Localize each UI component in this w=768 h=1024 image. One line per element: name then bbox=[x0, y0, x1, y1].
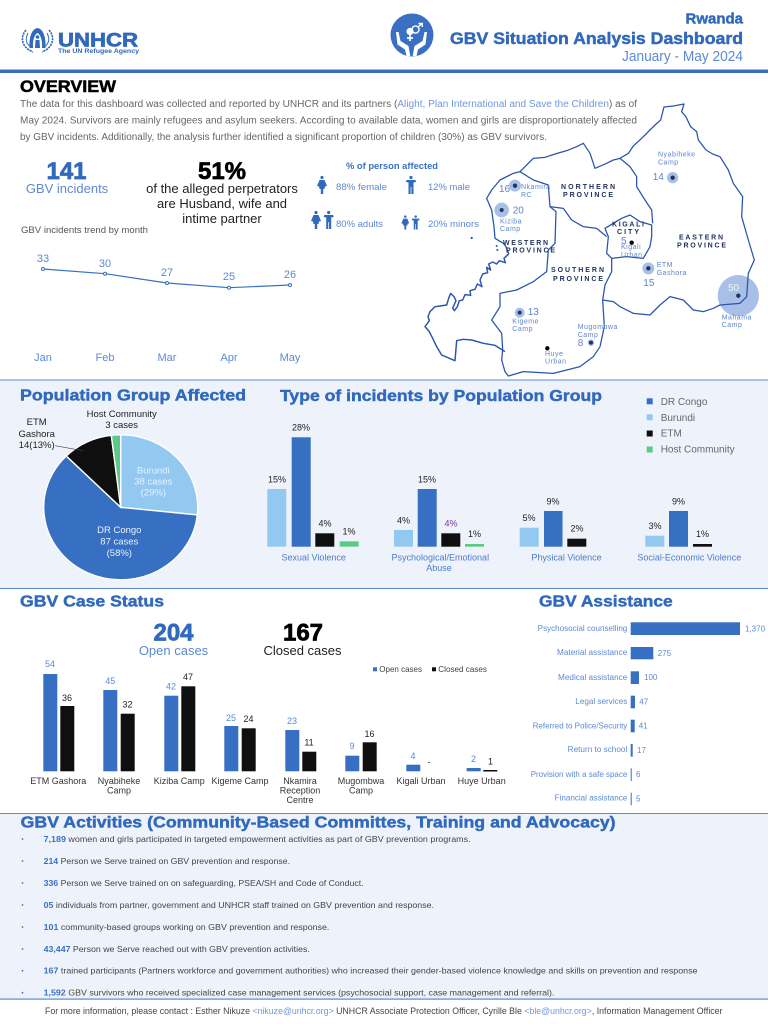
bar chart: incidents: 2% bbox=[570, 524, 584, 534]
icon: minors bbox=[401, 215, 420, 230]
bar chart: case status: 25 bbox=[226, 713, 236, 723]
icon: female bbox=[317, 176, 327, 194]
bar chart: incidents: 9% bbox=[546, 496, 560, 506]
bar chart: assistance: 1,370 bbox=[745, 624, 766, 634]
icon: adults bbox=[311, 211, 334, 229]
bar chart: case status: Kigeme Camp bbox=[211, 776, 269, 786]
bar chart: assistance: 275 bbox=[658, 649, 672, 658]
bar chart: incidents: 9% bbox=[672, 496, 685, 506]
panel: GBV assistance bbox=[531, 594, 766, 805]
map values: 8 bbox=[578, 338, 584, 349]
line chart: GBV incidents trend by month: 25 bbox=[223, 271, 235, 283]
bar chart: case status: Centre bbox=[286, 795, 314, 805]
map labels: provinces: SOUTHERN bbox=[551, 267, 604, 274]
legend: ETM bbox=[661, 428, 682, 440]
overview text bbox=[20, 99, 637, 143]
bar chart: case status: 45 bbox=[105, 676, 115, 686]
bar chart: case status: 4 bbox=[410, 751, 416, 761]
map values: 15 bbox=[643, 278, 655, 289]
bar chart: case status: Huye Urban bbox=[458, 776, 506, 786]
stat: closed cases: 167 bbox=[283, 620, 323, 647]
map labels: camps: Kigali bbox=[621, 244, 641, 251]
panel: GBV case status bbox=[20, 594, 506, 805]
bullet list: 101 community-based groups working on GBV prevention and response. bbox=[44, 922, 329, 932]
footer contact: For more information, please contact : Esther Nikuze <nikuze@unhcr.org> UNHCR Associate Protection Officer, Cyrille Ble <ble@unhcr.org>, Information Management Officer bbox=[45, 1006, 722, 1016]
bar chart: incidents: Physical Violence bbox=[531, 552, 602, 562]
overview text: May 2024. Survivors are mainly refugees and asylum seekers. According to available data, women and girls are disproportionately affected bbox=[20, 116, 637, 126]
icon: male bbox=[406, 176, 416, 194]
map labels: camps bbox=[500, 152, 752, 366]
bar chart: case status: Mugombwa bbox=[338, 776, 384, 786]
bar chart: incidents bbox=[267, 422, 741, 573]
bar chart: case status: 1 bbox=[488, 756, 493, 766]
map labels: camps: Huye bbox=[545, 351, 563, 358]
bar chart: case status: 24 bbox=[243, 714, 254, 724]
line chart: GBV incidents trend by month: 27 bbox=[161, 267, 173, 279]
map labels: provinces: PROVINCE bbox=[553, 276, 603, 283]
pie labels: 14(13%) bbox=[19, 440, 55, 451]
pie labels: 38 cases bbox=[134, 476, 173, 488]
pie labels: DR Congo bbox=[97, 525, 141, 536]
panel: population group affected bbox=[18, 388, 246, 580]
bar chart: case status: ETM Gashora bbox=[30, 776, 86, 786]
pie chart bbox=[44, 435, 198, 580]
bar chart: incidents: Sexual Violence bbox=[282, 552, 346, 562]
stat: perpetrators: of the alleged perpetrators bbox=[146, 181, 298, 196]
stat: GBV incidents: GBV incidents bbox=[26, 181, 109, 196]
bar chart: case status: Camp bbox=[107, 786, 131, 796]
map labels: camps: RC bbox=[521, 192, 532, 199]
bar chart: assistance: Medical assistance bbox=[558, 673, 628, 682]
line chart: GBV incidents trend by month: Jan bbox=[34, 352, 52, 364]
stat: GBV incidents: 141 bbox=[46, 158, 87, 185]
bar chart: case status: 2 bbox=[471, 754, 476, 764]
pie labels: ETM bbox=[27, 417, 47, 428]
bar chart: case status: Kigali Urban bbox=[396, 776, 446, 786]
bar chart: incidents: 5% bbox=[522, 513, 536, 523]
bar chart: case status: Nyabiheke bbox=[98, 776, 140, 786]
line chart: GBV incidents trend by month: GBV incidents trend by month bbox=[21, 225, 148, 236]
map values bbox=[499, 172, 740, 349]
panel: GBV activities: GBV Activities (Community-Based Committes, Training and Advocacy) bbox=[21, 814, 616, 831]
bar chart: assistance: Return to school bbox=[568, 745, 628, 754]
bar chart: incidents: 15% bbox=[418, 474, 436, 484]
bullet list: 167 trained participants (Partners workforce and government authorities) who increased their gender-based violence knowledge and skills on prevention and response bbox=[44, 966, 698, 976]
bar chart: case status: 36 bbox=[62, 693, 72, 703]
UNHCR logo: UNHCR bbox=[58, 30, 138, 52]
map labels: camps: Camp bbox=[500, 226, 521, 233]
bar chart: assistance: 100 bbox=[644, 673, 658, 682]
stat: open cases: 204 bbox=[153, 620, 194, 647]
pie labels: (58%) bbox=[107, 548, 132, 559]
bar chart: incidents: 4% bbox=[318, 518, 332, 528]
bar chart: incidents: Social-Economic Violence bbox=[637, 552, 741, 562]
stat: perpetrators bbox=[146, 158, 298, 226]
panel: GBV assistance: GBV Assistance bbox=[539, 594, 673, 611]
overview heading: OVERVIEW bbox=[20, 78, 116, 96]
map labels: camps: Nkamira bbox=[521, 184, 551, 191]
panel: % of person affected bbox=[311, 161, 479, 230]
stat: open cases bbox=[139, 620, 209, 658]
legend: Host Community bbox=[661, 444, 735, 456]
bar chart: assistance: 5 bbox=[636, 794, 641, 804]
legend: Open cases bbox=[379, 665, 422, 674]
map labels: provinces: EASTERN bbox=[679, 234, 723, 242]
bar chart: incidents: Abuse bbox=[426, 563, 452, 573]
bar chart: incidents: 1% bbox=[696, 529, 709, 539]
title: Rwanda bbox=[685, 10, 744, 28]
line chart: GBV incidents trend by month: Apr bbox=[220, 352, 238, 364]
overview text: by GBV incidents. Additionally, the analysis further identified a significant proportion of children (30%) as GBV survivors. bbox=[20, 132, 547, 143]
bar chart: incidents: 4% bbox=[444, 518, 458, 528]
panel: GBV case status: GBV Case Status bbox=[20, 594, 164, 611]
panel: type of incidents bbox=[267, 388, 741, 573]
panel: % of person affected: 12% male bbox=[428, 182, 470, 193]
map labels: camps: Nyabiheke bbox=[658, 152, 696, 158]
header bbox=[0, 10, 768, 73]
bar chart: incidents: 1% bbox=[468, 529, 481, 539]
stat: perpetrators: intime partner bbox=[182, 211, 262, 226]
pie labels: 87 cases bbox=[100, 536, 139, 548]
map labels: camps: Camp bbox=[578, 332, 598, 339]
pie labels: Burundi bbox=[137, 466, 170, 476]
map labels: provinces: PROVINCE bbox=[677, 242, 726, 250]
bar chart: assistance: Legal services bbox=[575, 697, 627, 706]
stat: GBV incidents bbox=[26, 158, 109, 196]
bar chart: assistance: Material assistance bbox=[557, 648, 628, 657]
map labels: provinces bbox=[503, 184, 726, 283]
bar chart: case status: 11 bbox=[304, 738, 314, 748]
bar chart: assistance bbox=[531, 622, 766, 805]
pie labels: 3 cases bbox=[105, 420, 138, 431]
legend: Burundi bbox=[661, 413, 695, 424]
bar chart: incidents: 28% bbox=[292, 422, 310, 432]
panel: population group affected: Population Group Affected bbox=[20, 388, 246, 405]
line chart: GBV incidents trend by month: Feb bbox=[96, 352, 114, 364]
panel: % of person affected: 80% adults bbox=[336, 219, 383, 230]
map values: 13 bbox=[528, 307, 539, 318]
bar chart: assistance: 17 bbox=[637, 746, 646, 755]
bullet list: 05 individuals from partner, government and UNHCR staff trained on GBV prevention and response. bbox=[44, 900, 434, 910]
panel: % of person affected: 20% minors bbox=[428, 219, 479, 230]
overview text: The data for this dashboard was collected and reported by UNHCR and its partners ( Alight, Plan International and Save the Children) as of bbox=[20, 99, 637, 110]
bar chart: assistance: 6 bbox=[636, 770, 641, 779]
map labels: provinces: CITY bbox=[617, 229, 639, 236]
panel: % of person affected: 88% female bbox=[336, 182, 387, 193]
map labels: camps: ETM bbox=[657, 262, 673, 269]
pie labels: Gashora bbox=[18, 429, 56, 440]
bar chart: case status: Nkamira bbox=[283, 776, 317, 786]
map labels: camps: Urban bbox=[545, 358, 567, 366]
UNHCR logo: The UN Refugee Agency bbox=[58, 49, 140, 55]
map labels: camps: Urban bbox=[621, 252, 643, 259]
bar chart: case status: 54 bbox=[45, 659, 55, 669]
bar chart: assistance: Referred to Police/Security bbox=[533, 722, 627, 730]
legend bbox=[647, 397, 735, 456]
map: Rwanda provinces bbox=[425, 104, 759, 376]
map labels: camps: Mahama bbox=[722, 314, 752, 322]
bar chart: assistance: 47 bbox=[639, 698, 649, 706]
bar chart: incidents: Psychological/Emotional bbox=[392, 552, 489, 562]
bullet list: 1,592 GBV survivors who received specialized case management services (psychosocial support, case management and referral). bbox=[44, 988, 554, 998]
map labels: camps: Camp bbox=[722, 322, 742, 329]
map labels: camps: Camp bbox=[512, 326, 533, 333]
bar chart: case status: Camp bbox=[349, 786, 373, 796]
bar chart: assistance: 41 bbox=[639, 722, 648, 730]
map values: 14 bbox=[653, 172, 664, 183]
map labels: camps: Mugombwa bbox=[578, 324, 618, 331]
pie labels: (29%) bbox=[141, 488, 166, 498]
bullet list: 43,447 Person we Serve reached out with GBV prevention activities. bbox=[44, 944, 310, 954]
map values: 50 bbox=[728, 283, 740, 294]
map labels: camps: Kiziba bbox=[500, 218, 522, 226]
bar chart: incidents: 4% bbox=[397, 516, 410, 526]
line chart: GBV incidents trend by month: Mar bbox=[158, 352, 177, 364]
stat: open cases: Open cases bbox=[139, 643, 209, 658]
UNHCR logo bbox=[22, 28, 140, 55]
map labels: provinces: PROVINCE bbox=[563, 192, 613, 199]
map values: 16 bbox=[499, 184, 511, 195]
line chart: GBV incidents trend by month: May bbox=[280, 352, 301, 364]
bar chart: incidents: 3% bbox=[648, 521, 662, 531]
title bbox=[450, 10, 744, 65]
map labels: camps: Gashora bbox=[657, 270, 687, 277]
title: GBV Situation Analysis Dashboard bbox=[450, 30, 743, 48]
map labels: provinces: NORTHERN bbox=[561, 184, 615, 191]
bar chart: assistance: Financial assistance bbox=[555, 794, 628, 802]
legend bbox=[373, 665, 487, 674]
map values: 20 bbox=[513, 206, 524, 216]
map labels: camps: Kigeme bbox=[512, 318, 539, 326]
map labels: camps: Camp bbox=[658, 160, 679, 166]
stat: perpetrators: 51% bbox=[198, 158, 246, 185]
bar chart: case status: Kiziba Camp bbox=[154, 776, 205, 786]
legend: DR Congo bbox=[661, 397, 708, 408]
map labels: provinces: WESTERN bbox=[503, 240, 548, 247]
bullet list: 214 Person we Serve trained on GBV prevention and response. bbox=[44, 856, 290, 866]
title: January - May 2024 bbox=[622, 49, 743, 65]
bar chart: case status: 32 bbox=[122, 700, 133, 710]
line chart: GBV incidents trend by month: 33 bbox=[37, 253, 49, 265]
map values: 5 bbox=[621, 236, 627, 247]
panel: type of incidents: Type of incidents by Population Group bbox=[280, 388, 602, 405]
bar chart: case status bbox=[30, 659, 506, 805]
line chart: GBV incidents trend by month: 26 bbox=[284, 269, 296, 281]
legend: Closed cases bbox=[438, 665, 487, 674]
bar chart: case status: Reception bbox=[280, 786, 320, 796]
stat: perpetrators: are Husband, wife and bbox=[157, 196, 287, 211]
map labels: provinces: KIGALI bbox=[612, 222, 644, 228]
panel: % of person affected: % of person affected bbox=[346, 161, 438, 171]
panel: population and incidents band bbox=[0, 380, 768, 588]
line chart: GBV incidents trend by month bbox=[21, 225, 301, 364]
bar chart: case status: 9 bbox=[349, 741, 355, 751]
bar chart: incidents: 15% bbox=[268, 474, 286, 484]
bar chart: case status: 47 bbox=[183, 672, 193, 682]
icon: GBV hands and gender symbol bbox=[390, 14, 434, 56]
pie labels: Host Community bbox=[87, 409, 157, 420]
bullet list: 7,189 women and girls participated in targeted empowerment activities as part of GBV prevention programs. bbox=[44, 834, 471, 844]
panel: GBV activities bbox=[0, 813, 768, 1000]
stat: closed cases bbox=[263, 620, 342, 658]
map labels: provinces: PROVINCE bbox=[506, 248, 555, 254]
pie labels bbox=[18, 409, 173, 559]
bar chart: case status: - bbox=[428, 757, 430, 767]
line chart: GBV incidents trend by month: 30 bbox=[99, 258, 111, 270]
bar chart: incidents: 1% bbox=[342, 526, 356, 536]
bar chart: case status: 16 bbox=[364, 729, 375, 739]
bar chart: assistance: Psychosocial counselling bbox=[538, 624, 627, 633]
bar chart: case status: 42 bbox=[166, 682, 176, 692]
stat: closed cases: Closed cases bbox=[263, 643, 342, 658]
bar chart: case status: 23 bbox=[287, 716, 297, 726]
bullet list bbox=[22, 834, 698, 998]
bullet list: 336 Person we Serve trained on on safeguarding, PSEA/SH and Code of Conduct. bbox=[44, 878, 364, 888]
bar chart: assistance: Provision with a safe space bbox=[531, 770, 628, 779]
